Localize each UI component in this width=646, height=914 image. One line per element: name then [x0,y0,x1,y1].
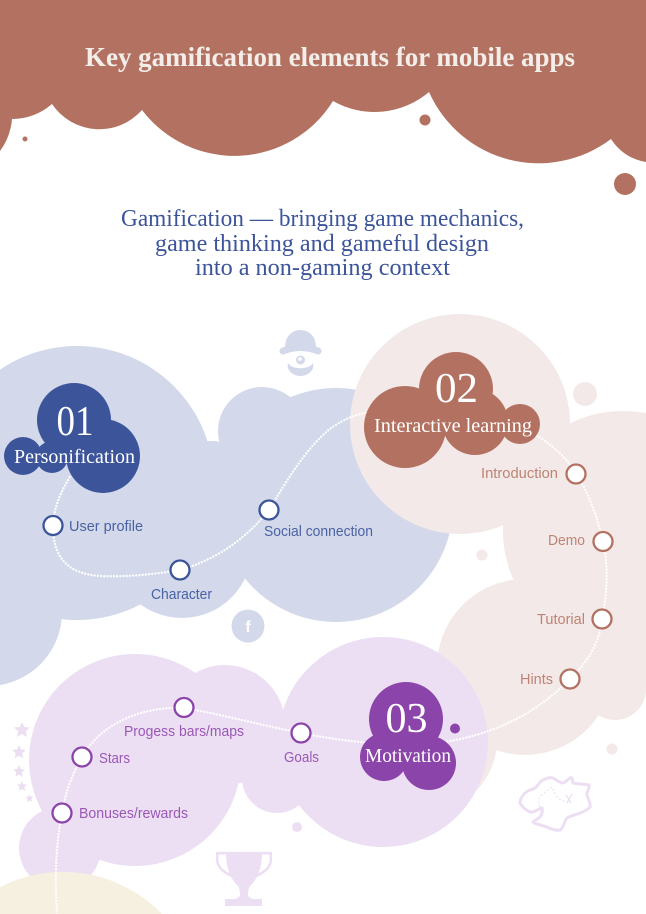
node: Bonuses/rewards: Bonuses/rewards [79,806,188,822]
node: Introduction [481,464,586,484]
node: Bonuses/rewards [52,804,188,822]
node: Tutorial: Tutorial [537,612,585,628]
decorative pink dots [476,382,618,754]
number 01: 01 [56,399,94,445]
node: User profile: User profile [69,519,143,535]
decorative purple dot [292,822,302,832]
node: Introduction: Introduction [481,466,558,482]
subtitle: Gamification — bringing game mechanics, [121,206,524,232]
node: Demo [548,532,612,551]
heading cloud 01 [4,383,140,493]
icon: clown [283,330,318,376]
node: Demo: Demo [548,533,585,549]
subtitle [121,206,524,281]
number 03: 03 [386,696,428,742]
title: Key gamification elements for mobile apps [85,42,575,72]
subtitle: into a non-gaming context [195,255,450,281]
heading Motivation: Motivation [365,746,451,767]
icon: facebook badge [232,610,264,642]
blue cloud background [0,346,453,686]
yellow cloud background [0,872,162,914]
node: Progress bars/maps: Progess bars/maps [124,724,244,740]
node: User profile [44,516,143,535]
heading Personification: Personification [14,447,135,468]
icon: trophy [216,852,272,906]
node: Goals: Goals [284,750,319,766]
panel: 03 Motivation [52,682,460,822]
icon: treasure map [520,778,590,830]
icon: stars [12,722,34,802]
node: Hints: Hints [520,672,553,688]
node: Progress bars/maps [124,698,244,740]
pink cloud background [350,314,646,812]
node: Character: Character [151,587,212,603]
header banner [0,0,646,163]
node: Social connection [260,500,373,540]
node: Social connection: Social connection [264,524,373,540]
panel: 01 Personification [4,383,373,603]
heading cloud 03 [360,682,460,790]
node: Hints [520,670,580,688]
node: Character [151,560,212,603]
dotted route path [53,409,607,914]
purple cloud background [19,637,488,889]
node: Stars: Stars [99,751,130,767]
heading cloud 02 [364,352,540,468]
icon: facebook badge: f [245,619,251,636]
decorative header dots [22,114,636,195]
header cloud shape [0,0,646,163]
node: Goals [284,724,319,766]
panel: 02 Interactive learning [364,352,612,688]
subtitle: game thinking and gameful design [155,231,489,257]
number 02: 02 [435,366,478,412]
node: Stars [72,748,130,767]
node: Tutorial [537,610,612,628]
heading Interactive learning: Interactive learning [374,416,532,437]
